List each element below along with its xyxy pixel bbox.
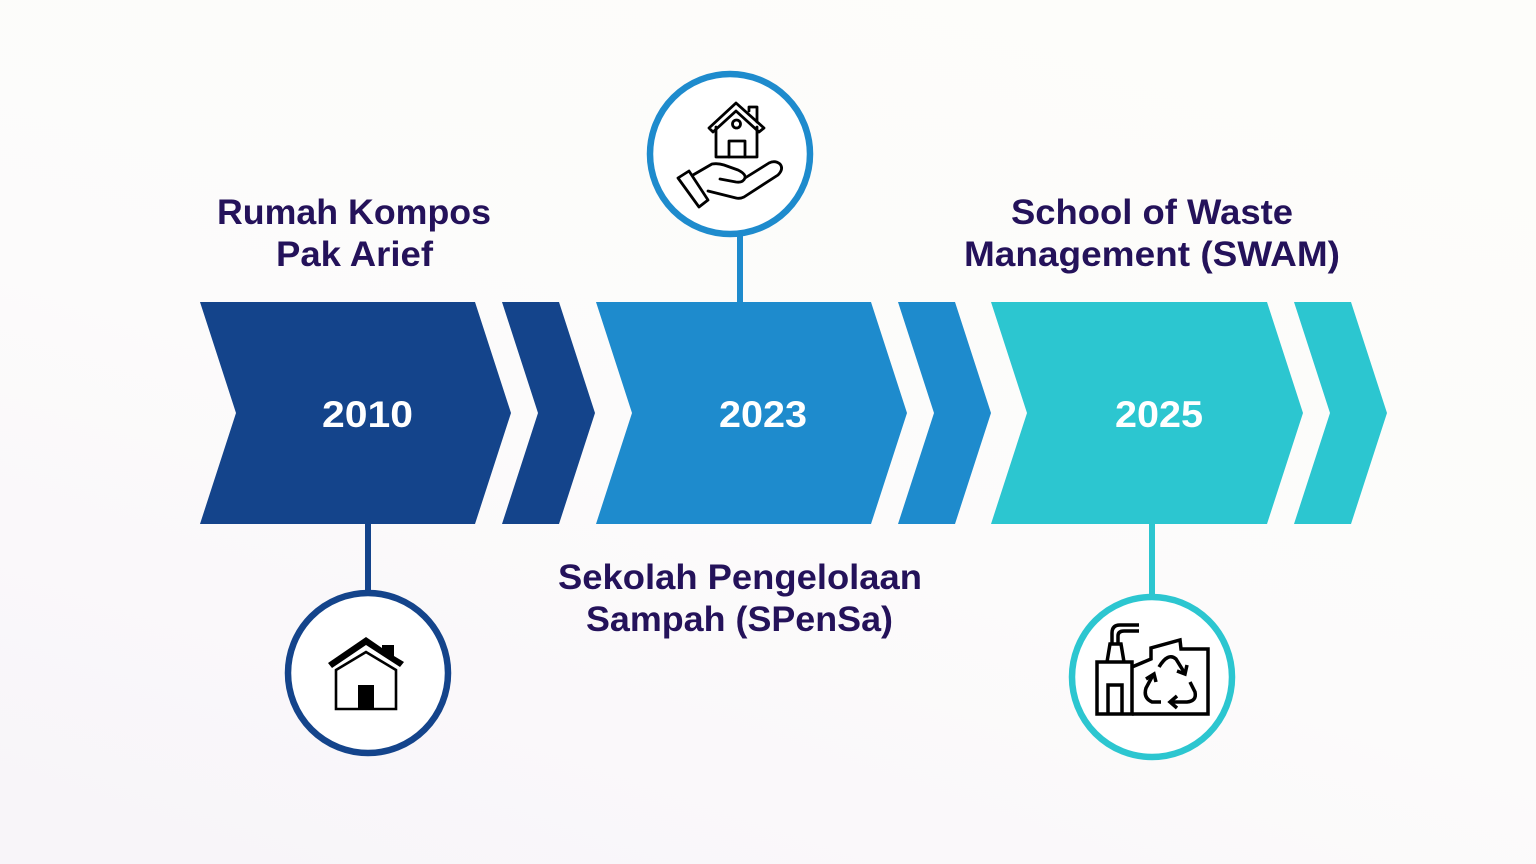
icon: recycling factory [1097,625,1208,714]
heading: Rumah Kompos Pak Arief: Pak Arief [276,235,433,274]
heading: School of Waste Management (SWAM): School of Waste [1011,193,1293,232]
heading: Rumah Kompos Pak Arief [217,193,491,274]
connector and badge: recycling factory [1072,524,1232,757]
heading: Sekolah Pengelolaan Sampah (SPenSa): Sampah (SPenSa) [586,600,893,639]
timeline segment: 2010: 2010 [322,394,413,435]
timeline segment: 2010 [200,302,595,524]
heading: Sekolah Pengelolaan Sampah (SPenSa) [558,558,922,639]
heading: Rumah Kompos Pak Arief: Rumah Kompos [217,193,491,232]
icon: hand holding house [678,103,782,207]
connector and badge: house [288,524,448,753]
icon: house [328,637,404,709]
heading: School of Waste Management (SWAM): Management (SWAM) [964,235,1340,274]
timeline segment: 2023 [596,302,991,524]
connector and badge: hand holding house [650,74,810,302]
heading: School of Waste Management (SWAM) [964,193,1340,274]
timeline segment: 2025: 2025 [1115,394,1203,435]
heading: Sekolah Pengelolaan Sampah (SPenSa): Sekolah Pengelolaan [558,558,922,597]
timeline segment: 2023: 2023 [719,394,807,435]
timeline segment: 2025 [991,302,1387,524]
